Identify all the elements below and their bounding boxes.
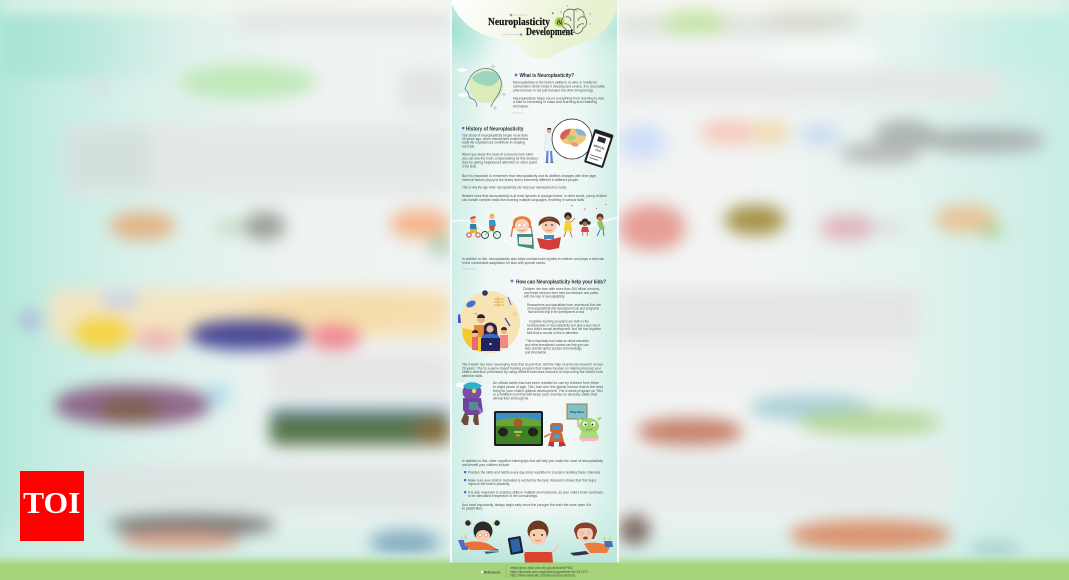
tip three: [464, 490, 603, 498]
text block: training tips: And most importantly, always begin early since the younger the brain the more open it is: [462, 503, 591, 507]
tip two: Make sure your child is motivated & excited by the task. Research shows that this helps: [468, 478, 596, 482]
footer band of blurred background: [0, 550, 1069, 580]
left side blocks: [240, 12, 450, 30]
text block: history intro: of the brain.: [462, 165, 477, 169]
icon: clipboard report: [584, 129, 614, 168]
text block: history detail: [462, 174, 607, 202]
illustration: boy with tablet: [508, 520, 559, 563]
icon: head with brain: [457, 64, 506, 110]
text block: how it helps: Cognitive learning programs are built on the: [529, 319, 589, 323]
text block: history intro: early life experiences contribute in shaping: [462, 141, 525, 145]
text block: how it helps: of neuroplasticity and developed tools and programs: [527, 307, 599, 311]
text block: how it helps: your child's overall development. And the true cognitive: [527, 327, 601, 331]
reference links: https://journals.plos.org/plosbiology/article?id=10.1371: [510, 570, 588, 574]
reference links: https://www.talihealth.com/about/neuroplasticity: [510, 574, 575, 578]
text block: how it helps: fundamentals of neuroplasticity and play a key role in: [527, 323, 600, 327]
text block: how it helps: [523, 287, 601, 354]
text block: TALi research: [462, 362, 604, 378]
text block: history intro: The study of neuroplasticity began more than: [462, 133, 528, 137]
panel: history of neuroplasticity: [452, 119, 617, 265]
text block: history intro: you can see the brain compensating for this sensory: [462, 156, 538, 160]
tip three: It is also important to practice skills in multiple environments, as your child's brain continues: [468, 490, 603, 494]
text block: TALi tablet: to eight years of age, TALi has won the global honour that is the best: [493, 385, 603, 389]
references label: [481, 570, 500, 574]
illustration: purple mascot: [456, 382, 483, 425]
text block: how it helps: with the help of neuroplasticity.: [524, 295, 565, 299]
illustration: green monster with sign: Play Now: [570, 410, 584, 414]
ampersand badge: &: [556, 18, 563, 27]
text block: training tips: In addition to this, other cognitive training tips that will help you make the most of neuroplasticity: [462, 459, 603, 463]
text block: how it helps: Researchers and specialists have understood this role: [527, 303, 601, 307]
text block: injuries note: in the comfortable adaptation for kids with special needs.: [462, 261, 546, 265]
icon: brain outline: [560, 5, 591, 33]
text block: history intro: 30 years ago, when researchers realized that: [462, 137, 528, 141]
text block: definition: phenomenon in not just humans but other living beings.: [513, 88, 594, 92]
illustration: children learning: [452, 204, 617, 250]
illustration: boy lying with tablet: [570, 522, 614, 556]
text block: history detail: can handle complex tasks like learning multiple languages, excelling in various skills.: [462, 198, 585, 202]
text block: TALi tablet: An official tablet that has been created for use by children from three: [493, 381, 599, 385]
title line one: Neuroplasticity: [488, 17, 550, 28]
text block: how it helps: and these neurons form new connections and paths: [524, 291, 598, 295]
title: [488, 17, 574, 38]
text block: TALi tablet: is a brilliant tool that will keep your mentee to develop skills that: [493, 392, 597, 396]
text block: history intro: When you study the brain of someone born blind: [462, 152, 533, 156]
text block: injuries note: In addition to this, neuroplasticity also helps combat brain injuries in children and plays a vital role: [462, 257, 604, 261]
title line two: Development: [526, 27, 574, 38]
tip two: [464, 478, 596, 486]
text block: TALi research: child's attention processes by using refined exercises focused on improving the child's core: [462, 370, 603, 374]
father: [474, 314, 488, 337]
illustration: tablet with game: [494, 411, 543, 446]
text block: how it helps: and information.: [525, 350, 547, 354]
text block: how it helps: kids uninterrupted access to knowledge: [525, 347, 582, 351]
panel: what is neuroplasticity: [457, 64, 605, 110]
icon: clipboard report: FILE: [595, 148, 602, 153]
text block: history intro: [462, 133, 538, 169]
text block: TALi tablet: thing for your child's optimal development. The 5-week program on TALi: [493, 389, 603, 393]
text block: definition: Neuroplasticity is the brain's ability to re-wire or modify its: [513, 81, 597, 85]
references label: References: [484, 570, 500, 574]
heading: how can neuroplasticity help: How can Neuroplasticity help your kids?: [516, 279, 606, 285]
text block: training tips: and benefit your children include:: [462, 463, 510, 467]
decorative title markers: [503, 12, 554, 36]
right side blocks: [619, 15, 830, 35]
footer: references band: [450, 562, 619, 580]
panel: how can neuroplasticity help your kids: [456, 279, 614, 563]
text block: how it helps: This is especially true today as virtual education: [526, 339, 589, 343]
text block: how it helps: that will best help in the development of kids.: [528, 310, 585, 314]
panel: centre infographic column: [450, 0, 619, 580]
text block: history intro: loss by giving heightened attention to other parts: [462, 160, 537, 164]
illustration: family with laptop: [458, 290, 520, 353]
text block: TALi research: TALi Health has been developing tools that do just that, with the help of profound research of over: [462, 362, 604, 366]
text block: history intro: our brain.: [462, 144, 475, 148]
illustration: boy reading: [537, 217, 561, 250]
illustration: green monster with sign: [567, 404, 602, 443]
tip three: to be stimulated irrespective of the surroundings.: [468, 494, 538, 498]
child left: [472, 330, 478, 350]
icon: magnifier with brain: [552, 119, 592, 159]
icon: clipboard report: MEDICAL: [593, 143, 606, 151]
text block: definition: [513, 81, 605, 108]
text block: training tips: [462, 459, 603, 511]
header shape: [452, 0, 617, 59]
illustration: girl reading: [511, 216, 534, 249]
reference links: [510, 566, 588, 578]
mother: [481, 322, 501, 343]
text block: TALi research: 20 years. TALi is a game-based training program that mainly focuses on helping improve your: [462, 366, 602, 370]
text block: definition: connections which helps it develop and evolve. It is a lucrative: [513, 84, 605, 88]
text block: how it helps: skill that is crucial in this is attention.: [527, 331, 579, 335]
logo: TOI: TOI: [23, 485, 81, 520]
illustration: dancing children: [564, 204, 606, 237]
illustration: girl lying with tablet: [458, 520, 502, 554]
text block: definition: information.: [513, 104, 529, 108]
text block: how it helps: Children are born with more than 100 billion neurons,: [523, 287, 600, 291]
illustration: orange robot: [544, 423, 566, 446]
text block: definition: Neuroplasticity helps you in everything from learning to ride: [513, 96, 604, 100]
text block: history detail: This is why the age when neuroplasticity can help your development is crucial.: [462, 186, 567, 190]
text block: history detail: external factors (injury to the brain) and is extremely different in different people.: [462, 178, 579, 182]
heading: history: History of Neuroplasticity: [466, 126, 524, 132]
text block: training tips: to plasticities.: [462, 507, 483, 511]
text block: history detail: Besides since that neuroplasticity is at most dynamic in younger brains. In other words, young children: [462, 194, 607, 198]
left lower blocks: [50, 290, 450, 340]
text block: TALi tablet: [493, 381, 603, 400]
text block: TALi research: attention skills.: [462, 374, 483, 378]
text block: definition: a bike to focussing in class and learning and retaining: [513, 100, 597, 104]
text block: TALi tablet: will help them all through life.: [493, 396, 529, 400]
illustration: children on bikes: [467, 214, 500, 238]
text block: how it helps: and online development courses can help give your: [525, 343, 590, 347]
reference links: https://pmc.ncbi.nlm.nih.gov/articles/PMC: [510, 566, 574, 570]
child right: [500, 327, 508, 348]
text block: history detail: But it is important to remember that neuroplasticity and its abilities changes with time (age,: [462, 174, 597, 178]
icon: doctor: [544, 128, 557, 162]
logo: TOI: [20, 471, 84, 541]
tip two: improve the brain's plasticity.: [468, 482, 510, 486]
text block: injuries note: [462, 257, 604, 265]
tip one: Practice the skills and habits every day since repetition is crucial in building these channels.: [468, 471, 601, 475]
illustration: children with tablets: [458, 520, 614, 563]
laptop: [481, 338, 500, 351]
heading: what is neuroplasticity: What is Neuroplasticity?: [520, 73, 574, 79]
